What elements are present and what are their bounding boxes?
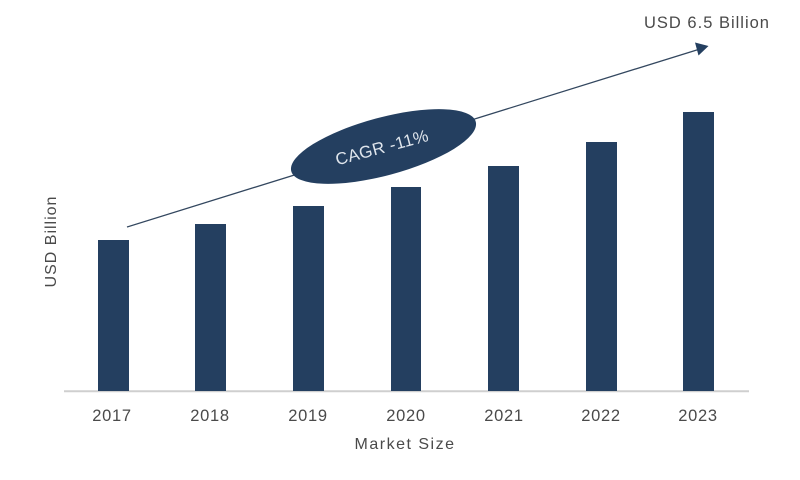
CAGR ellipse callout xyxy=(284,94,483,199)
year labels: 2017 xyxy=(92,407,132,425)
year labels xyxy=(92,407,718,425)
growth arrow xyxy=(127,42,708,227)
CAGR ellipse callout: CAGR -11% xyxy=(333,126,431,169)
end value label: USD 6.5 Billion xyxy=(644,14,770,32)
x axis title: Market Size xyxy=(355,436,455,453)
year labels: 2018 xyxy=(190,407,230,425)
x axis line xyxy=(64,390,749,392)
year labels: 2020 xyxy=(386,407,426,425)
year labels: 2022 xyxy=(581,407,621,425)
year labels: 2019 xyxy=(288,407,328,425)
y axis title: USD Billion xyxy=(43,196,60,287)
bars xyxy=(98,112,714,391)
year labels: 2023 xyxy=(678,407,718,425)
year labels: 2021 xyxy=(484,407,524,425)
